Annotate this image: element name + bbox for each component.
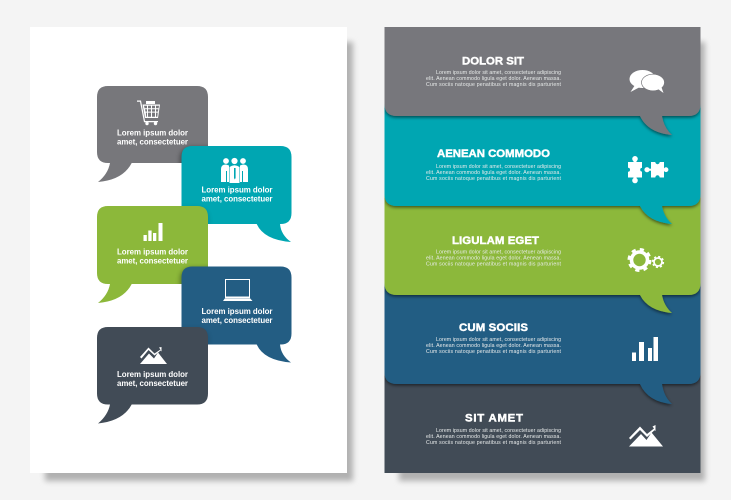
icon: team of people bbox=[221, 158, 248, 183]
heading: SIT AMET bbox=[465, 412, 523, 424]
bubble: green chart bbox=[97, 206, 208, 303]
bubble: dark mountain bbox=[97, 327, 208, 424]
icon: bar chart bbox=[632, 337, 658, 361]
bubble text: Lorem ipsum dolor bbox=[117, 128, 188, 138]
bubble: blue laptop bbox=[182, 266, 292, 362]
band: cum sociis bbox=[384, 280, 700, 404]
bubble text: Lorem ipsum dolor bbox=[117, 370, 188, 379]
bubble: gray shopping bbox=[97, 86, 208, 182]
text block: elit. Aenean commodo ligula eget dolor. Aenean massa. bbox=[426, 343, 561, 349]
left page bbox=[30, 27, 347, 473]
text block bbox=[426, 164, 562, 182]
text block: Cum sociis natoque penatibus et magnis dis parturient bbox=[426, 440, 562, 446]
icon: chat bubbles bbox=[630, 70, 664, 93]
text block bbox=[426, 70, 562, 88]
panel: left page speech bubbles bbox=[97, 86, 292, 424]
text block bbox=[426, 337, 562, 355]
bubble text: Lorem ipsum dolor bbox=[202, 186, 272, 194]
text block: Cum sociis natoque penatibus et magnis dis parturient bbox=[426, 262, 562, 268]
overlap shadow on teal bubble bbox=[207, 211, 210, 224]
panel: right page bands bbox=[384, 27, 700, 473]
bubble text: amet, consectetuer bbox=[117, 138, 188, 146]
text block: elit. Aenean commodo ligula eget dolor. Aenean massa. bbox=[426, 170, 561, 176]
bubble text: Lorem ipsum dolor bbox=[202, 307, 272, 316]
text block: elit. Aenean commodo ligula eget dolor. Aenean massa. bbox=[426, 434, 561, 440]
bubble text bbox=[117, 128, 188, 146]
icon: mountain trend bbox=[629, 425, 663, 446]
icon: laptop bbox=[223, 279, 252, 301]
icon: mountain trend bbox=[140, 347, 167, 364]
text block: Lorem ipsum dolor sit amet, consectetuer adipiscing bbox=[436, 250, 561, 256]
text block: Lorem ipsum dolor sit amet, consectetuer adipiscing bbox=[436, 337, 561, 343]
text block bbox=[426, 428, 562, 446]
text block: Lorem ipsum dolor sit amet, consectetuer adipiscing bbox=[436, 164, 561, 170]
text block: elit. Aenean commodo ligula eget dolor. Aenean massa. bbox=[426, 256, 561, 262]
bubble text: amet, consectetuer bbox=[117, 379, 188, 388]
bubble text: amet, consectetuer bbox=[202, 194, 272, 204]
left page shadow bbox=[45, 42, 353, 481]
bubble text bbox=[202, 307, 272, 325]
heading: LIGULAM EGET bbox=[452, 235, 539, 247]
bubble text: Lorem ipsum dolor bbox=[117, 248, 188, 256]
icon: shopping cart bbox=[137, 100, 160, 125]
band: sit amet bbox=[384, 370, 700, 473]
right page shadow bbox=[399, 42, 705, 481]
band: aenean commodo bbox=[384, 100, 700, 224]
heading: DOLOR SIT bbox=[462, 56, 524, 68]
icon: puzzle pieces bbox=[626, 156, 668, 183]
bubble text bbox=[117, 248, 188, 266]
text block: Cum sociis natoque penatibus et magnis dis parturient bbox=[426, 349, 562, 355]
heading: AENEAN COMMODO bbox=[437, 148, 550, 160]
text block bbox=[426, 250, 562, 268]
bubble text bbox=[117, 370, 188, 388]
overlap shadow on gray bubble bbox=[178, 145, 208, 163]
bubble: teal team bbox=[182, 146, 292, 242]
text block: Lorem ipsum dolor sit amet, consectetuer adipiscing bbox=[436, 70, 561, 76]
band: ligulam eget bbox=[384, 190, 700, 313]
bubble text: amet, consectetuer bbox=[202, 316, 272, 325]
text block: Cum sociis natoque penatibus et magnis dis parturient bbox=[426, 176, 562, 182]
text block: Lorem ipsum dolor sit amet, consectetuer adipiscing bbox=[436, 428, 561, 434]
band: dolor sit bbox=[384, 27, 700, 135]
overlap shadow on blue bubble bbox=[208, 336, 209, 344]
icon: gears bbox=[629, 249, 663, 271]
bubble text bbox=[202, 186, 272, 204]
text block: elit. Aenean commodo ligula eget dolor. Aenean massa. bbox=[426, 76, 561, 82]
overlap shadow on green bubble bbox=[178, 265, 208, 284]
text block: Cum sociis natoque penatibus et magnis dis parturient bbox=[426, 82, 562, 88]
bubble text: amet, consectetuer bbox=[117, 256, 188, 266]
icon: bar chart bbox=[144, 223, 162, 241]
heading: CUM SOCIIS bbox=[459, 322, 528, 334]
